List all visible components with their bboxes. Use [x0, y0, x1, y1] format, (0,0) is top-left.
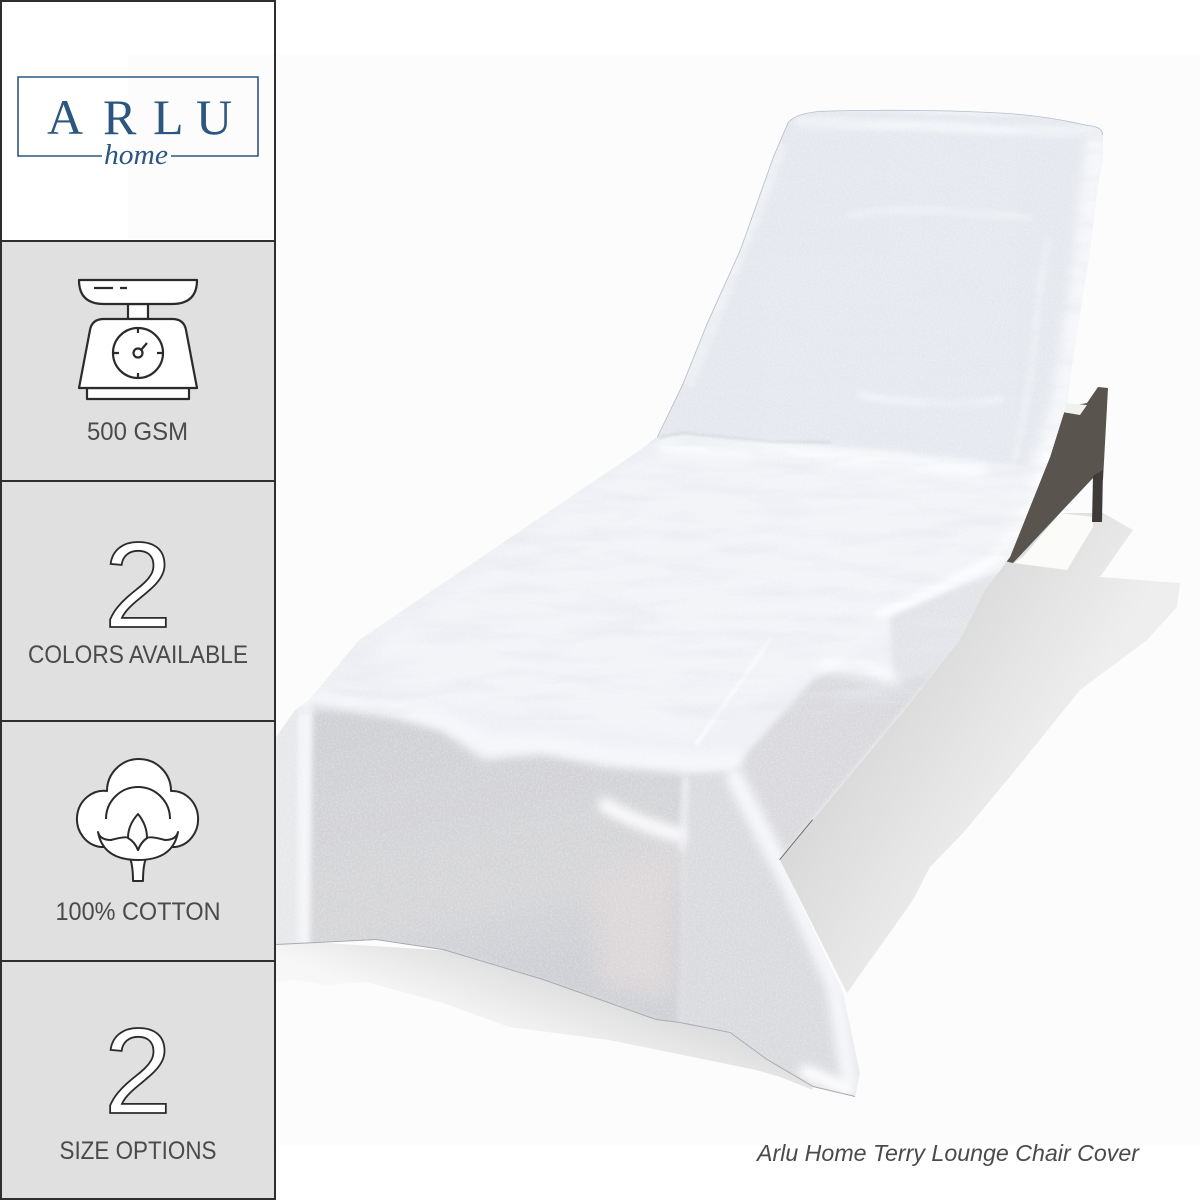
towel: terry texture: [312, 432, 921, 1070]
label: 500 GSM: 500 GSM: [87, 418, 188, 446]
chair leg: [1092, 470, 1103, 522]
towel: highlights: [304, 640, 905, 1090]
lounge chair frame: [1000, 387, 1108, 563]
ground shadow: [276, 513, 1180, 1090]
label: size options: SIZE OPTIONS: [60, 1137, 216, 1165]
towel: outline edges: [276, 110, 1103, 1097]
panel frame and dividers: [0, 0, 276, 1200]
logo script: home: [104, 139, 168, 171]
panel: material: [1, 721, 275, 960]
towel: under roll: [890, 574, 996, 680]
logo frame: [18, 77, 258, 156]
chair slat: [1062, 403, 1087, 415]
towel: seat highlight: [360, 455, 1030, 740]
panel: colors: [1, 481, 275, 720]
icon: kitchen scale: [79, 280, 197, 399]
towel: rolled edge: [880, 440, 1052, 615]
towel: side drape: [736, 672, 932, 853]
towel: left side strip: [277, 716, 296, 944]
towel: base: [296, 111, 1064, 756]
towel: front right flap: [680, 770, 860, 1100]
white terry towel: [276, 100, 1116, 1100]
label: colors available: COLORS AVAILABLE: [28, 641, 248, 669]
towel: wrinkle mottling: [366, 136, 1102, 696]
number: 2: 2: [104, 517, 172, 653]
logo wordmark: ARLU: [47, 89, 232, 145]
towel: back rest rims: [660, 122, 1098, 565]
caption: Arlu Home Terry Lounge Chair Cover: [755, 1140, 1140, 1166]
towel: back rest: [656, 114, 1080, 467]
towel: pink reflected tint: [598, 879, 672, 994]
number: 2: 2: [104, 1003, 172, 1139]
towel: front drop: [300, 703, 686, 1030]
label: 100% cotton: 100% COTTON: [56, 898, 220, 926]
panel: sizes: [1, 961, 275, 1199]
panel: logo: [1, 1, 275, 240]
icon: cotton boll: [77, 759, 198, 881]
panel: weight: [1, 241, 275, 480]
sunlit patch under chair: [1013, 513, 1093, 570]
